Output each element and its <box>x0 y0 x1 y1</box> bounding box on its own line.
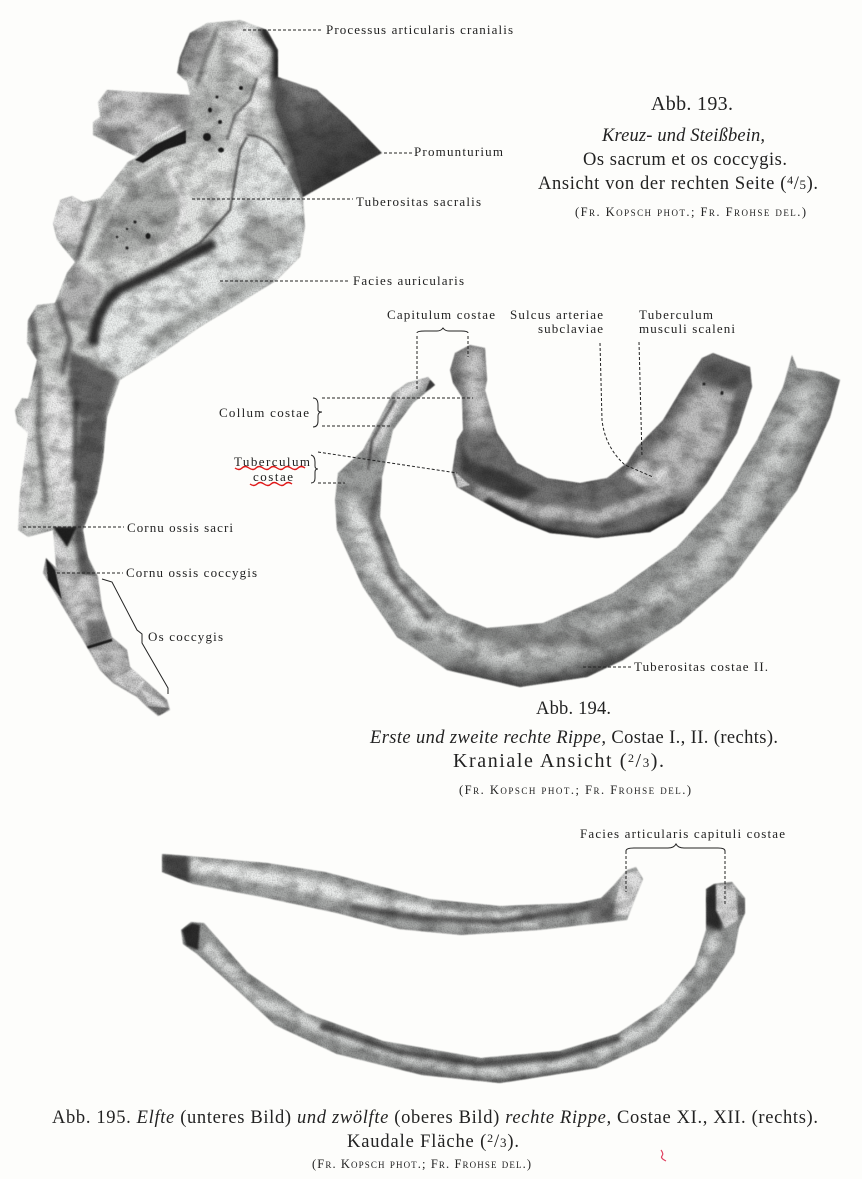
caption: figure 194: Erste und zweite rechte Rippe, Costae I., II. (rechts). <box>369 728 778 748</box>
small red mark <box>661 1150 666 1161</box>
red handwritten underlines <box>235 466 305 486</box>
caption: figure 194: / <box>636 750 642 772</box>
labels and leaders: sacrum: Promunturium <box>414 144 503 159</box>
caption: figure 194 <box>369 728 778 772</box>
labels and leaders: ribs I and II: subclaviae <box>538 321 603 336</box>
labels and leaders: sacrum: Facies auricularis <box>353 273 464 288</box>
credit: figure 194: (Fr. Kopsch phot.; Fr. Frohse del.) <box>459 783 691 797</box>
heading: Abb. 194: Abb. 194. <box>536 699 611 719</box>
label and brace: Facies articularis capituli costae: Facies articularis capituli costae <box>580 826 785 841</box>
caption: figure 195: 2 <box>487 1131 493 1145</box>
labels and leaders: ribs I and II: Collum costae <box>219 405 309 420</box>
labels and leaders: sacrum: Tuberositas sacralis <box>356 194 481 209</box>
illustration: eleventh rib <box>180 881 746 1084</box>
caption: figure 194: 3). <box>643 750 664 772</box>
caption: figure 195: Kaudale Fläche ( <box>347 1132 486 1152</box>
foramina spots <box>116 86 243 250</box>
caption: figure 193: 4 <box>787 173 793 187</box>
labels and leaders: ribs I and II: Tuberculum <box>639 307 713 322</box>
labels and leaders: ribs I and II: costae <box>253 469 293 484</box>
brace and label: Os coccygis: Os coccygis <box>148 629 223 644</box>
credit: figure 193: (Fr. Kopsch phot.; Fr. Frohse del.) <box>575 205 806 219</box>
caption: figure 195: 3). <box>500 1132 519 1152</box>
labels and leaders: sacrum: Processus articularis cranialis <box>326 22 513 37</box>
caption: figure 195: / <box>494 1132 500 1152</box>
illustration: second rib <box>330 345 850 695</box>
caption: figure 194: Kraniale Ansicht ( <box>453 750 626 772</box>
caption: figure 193: Ansicht von der rechten Seite ( <box>538 174 786 194</box>
caption: figure 193: / <box>794 174 800 194</box>
illustration: sacrum, right side view <box>14 20 382 578</box>
labels and leaders: sacrum: Cornu ossis coccygis <box>126 565 257 580</box>
illustration: twelfth rib <box>161 853 644 936</box>
caption: figure 195: Abb. 195. Elfte (unteres Bild) und zwölfte (oberes Bild) rechte Rippe, Costae XI., XII. (rechts). <box>52 1108 818 1128</box>
labels and leaders: ribs I and II: Sulcus arteriae <box>510 307 603 322</box>
caption: figure 193 <box>538 126 818 194</box>
labels and leaders: ribs I and II <box>219 307 768 674</box>
caption: figure 195 <box>52 1108 818 1152</box>
labels and leaders: sacrum <box>23 22 513 580</box>
caption: figure 193: 5). <box>799 174 818 194</box>
brace and label: Os coccygis <box>102 579 223 694</box>
labels and leaders: ribs I and II: Tuberculum <box>234 454 310 469</box>
caption: figure 194: 2 <box>628 751 634 765</box>
label and brace: Facies articularis capituli costae <box>580 826 785 905</box>
heading: Abb. 193: Abb. 193. <box>651 93 733 115</box>
caption: figure 193: Kreuz- und Steißbein, <box>601 126 765 146</box>
labels and leaders: ribs I and II: Capitulum costae <box>387 307 495 322</box>
illustration: coccyx <box>40 555 175 720</box>
illustration: first rib <box>449 344 753 539</box>
labels and leaders: ribs I and II: Tuberositas costae II. <box>634 659 768 674</box>
caption: figure 193: Os sacrum et os coccygis. <box>583 150 787 170</box>
labels and leaders: ribs I and II: musculi scaleni <box>639 321 735 336</box>
labels and leaders: sacrum: Cornu ossis sacri <box>127 520 233 535</box>
credit: figure 195: (Fr. Kopsch phot.; Fr. Frohse del.) <box>312 1157 531 1171</box>
